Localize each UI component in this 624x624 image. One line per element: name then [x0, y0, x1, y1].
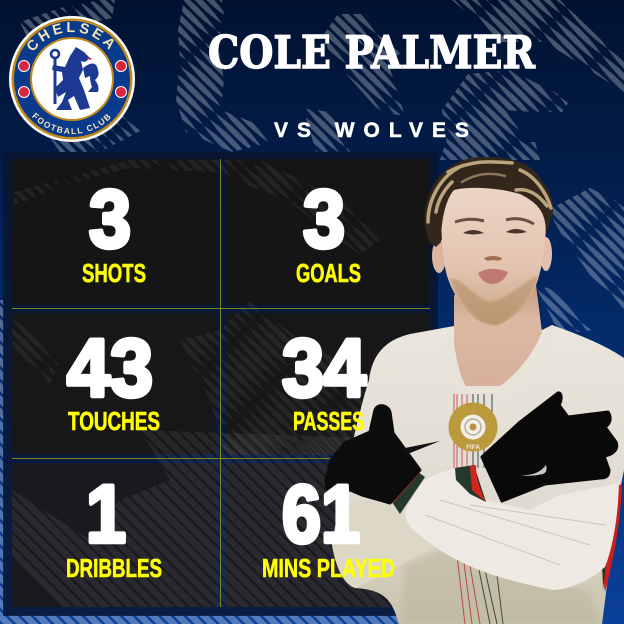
crest text: Chelsea: CHELSEA — [27, 22, 114, 50]
stat: passes: PASSES — [293, 406, 364, 436]
stat: touches: 43 — [67, 323, 153, 414]
shirt side stripe — [602, 484, 622, 592]
neck — [454, 285, 542, 386]
stat: minutes played — [262, 469, 395, 583]
back arm — [332, 500, 445, 588]
glove tip — [400, 441, 440, 455]
cell: passes — [225, 313, 429, 454]
right cuff — [455, 465, 486, 502]
glove logo — [521, 465, 547, 476]
stat: shots — [82, 174, 146, 288]
stat: passes: 34 — [282, 323, 366, 414]
right ear — [540, 237, 552, 271]
panel backing — [3, 152, 438, 616]
hair — [424, 157, 553, 247]
horizontal divider 2 — [12, 458, 430, 459]
shirt side stripe dark — [602, 500, 613, 590]
panel texture — [12, 160, 420, 455]
player photo — [326, 157, 624, 624]
crest roses — [18, 60, 126, 98]
stat: minutes played: MINS PLAYED — [262, 553, 395, 583]
stat: dribbles — [66, 469, 162, 583]
stat: minutes played: 61 — [282, 469, 360, 560]
horizontal divider 1 — [12, 308, 430, 309]
stat: goals — [296, 174, 361, 288]
hair highlights — [428, 162, 551, 222]
background pattern bands — [20, 0, 624, 335]
eyes — [463, 229, 527, 234]
stat: goals: 3 — [303, 174, 345, 265]
right glove — [482, 393, 617, 501]
stat: shots: 3 — [89, 174, 131, 265]
stat: dribbles: DRIBBLES — [66, 553, 162, 583]
stat: goals: GOALS — [296, 258, 361, 288]
subtitle: VS WOLVES — [274, 119, 469, 142]
arm ribbing — [425, 500, 605, 565]
left cuff red — [390, 470, 420, 503]
face — [441, 181, 546, 325]
lower panel stripes — [12, 430, 429, 607]
crest lion — [51, 47, 99, 110]
player torso — [332, 325, 624, 624]
nose — [484, 256, 502, 261]
cell: dribbles — [12, 463, 216, 607]
stat: touches: TOUCHES — [68, 406, 160, 436]
stubble — [450, 276, 538, 326]
collar — [446, 328, 553, 394]
crest: Chelsea FC — [9, 16, 135, 142]
cell: goals — [225, 159, 429, 305]
crest text: Football Club: FOOTBALL CLUB — [32, 112, 110, 134]
right cuff red — [470, 465, 486, 502]
stats panel — [3, 152, 438, 616]
lower background pattern — [0, 300, 400, 624]
torso shading — [400, 550, 600, 624]
cell: shots — [12, 159, 216, 305]
left ear — [432, 239, 446, 273]
stats numbers and labels — [66, 174, 395, 583]
left cuff — [392, 472, 425, 514]
mouth — [478, 269, 508, 284]
front arm — [405, 468, 619, 590]
chest stripes — [454, 394, 503, 624]
stat: shots: SHOTS — [82, 258, 146, 288]
left glove — [326, 406, 420, 503]
cell: minutes played — [225, 463, 429, 607]
title: COLE PALMER — [208, 26, 536, 79]
cell: touches — [12, 313, 216, 454]
eyebrows — [455, 219, 534, 224]
vertical divider — [220, 159, 221, 607]
stat: dribbles: 1 — [86, 469, 126, 560]
medal — [448, 402, 498, 452]
medal text: FIFA — [466, 444, 480, 451]
